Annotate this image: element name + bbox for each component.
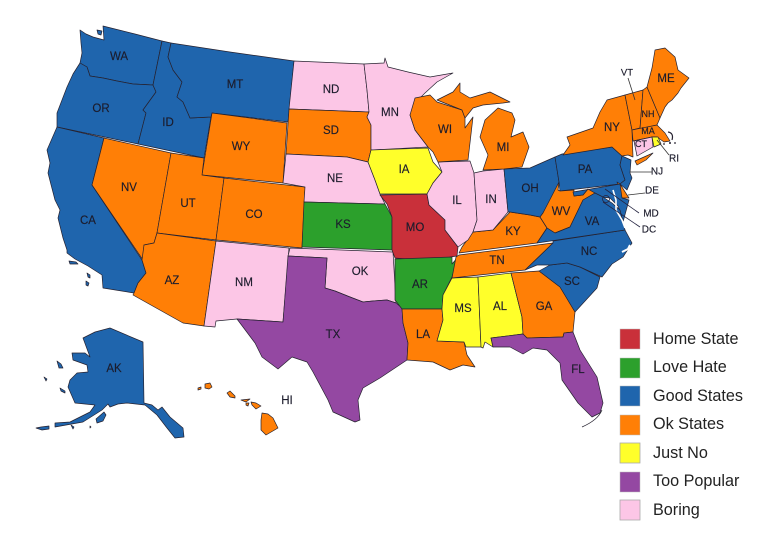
- state: Vermont: [625, 90, 643, 130]
- state: North Dakota: ND: [323, 84, 339, 96]
- state: Kentucky: KY: [505, 226, 521, 238]
- state: Texas: [237, 256, 408, 422]
- state: Ohio: OH: [521, 183, 539, 195]
- state: South Carolina: SC: [564, 276, 580, 288]
- legend item: Love Hate: [620, 358, 727, 378]
- state: Oregon: OR: [92, 103, 110, 115]
- sound: Pamlico: [622, 245, 630, 252]
- state: Colorado: CO: [245, 209, 263, 221]
- state: Washington: [80, 26, 162, 85]
- state: Louisiana: LA: [416, 329, 430, 341]
- legend item: Just No: Just No: [653, 444, 708, 462]
- state: South Dakota: [286, 109, 371, 162]
- state: Idaho: ID: [162, 117, 174, 129]
- callouts: small state labels and leader lines: VT: [621, 68, 633, 78]
- legend item: Good States: [620, 386, 743, 406]
- state: Alaska: [36, 328, 184, 438]
- legend item: Ok States: Ok States: [653, 415, 724, 433]
- state: Wisconsin: WI: [438, 124, 452, 136]
- callouts: small state labels and leader lines: [602, 68, 679, 236]
- state: North Carolina: [525, 230, 632, 277]
- state: Ohio: [504, 157, 559, 217]
- state: Iowa: [368, 148, 442, 194]
- state: Delaware: [617, 182, 629, 198]
- state: Michigan: MI: [497, 142, 509, 154]
- state: Alabama: AL: [493, 301, 508, 313]
- state: Louisiana: [402, 309, 475, 370]
- state: Iowa: IA: [399, 164, 410, 176]
- state: Washington: WA: [110, 51, 128, 63]
- callouts: small state labels and leader lines: NJ: [651, 166, 663, 178]
- state: New Jersey: [620, 156, 632, 190]
- state: Arizona: [133, 233, 216, 326]
- state: Colorado: [216, 178, 305, 248]
- legend item: Home State: [620, 329, 738, 349]
- state: Wyoming: WY: [232, 141, 251, 153]
- state: Georgia: GA: [536, 301, 553, 313]
- state: Wyoming: [202, 113, 287, 183]
- state: Florida: [491, 332, 603, 427]
- legend item: Boring: Boring: [653, 501, 700, 519]
- state: Virginia: [537, 193, 625, 243]
- state: Nevada: NV: [121, 182, 137, 194]
- state: Mississippi: MS: [454, 303, 472, 315]
- legend item: Ok States: [620, 415, 724, 435]
- state: Alabama: [478, 273, 523, 348]
- state: Arkansas: [395, 257, 458, 309]
- state: Georgia: [511, 271, 575, 338]
- state: Missouri: MO: [406, 222, 424, 234]
- state: Missouri: [380, 194, 458, 263]
- callouts: small state labels and leader lines: DC: [642, 224, 656, 236]
- state: South Carolina: [539, 263, 600, 312]
- state: Hawaii: HI: [281, 395, 293, 407]
- state: Oklahoma: [288, 248, 396, 303]
- state: Oregon: [57, 63, 156, 144]
- state: Utah: [157, 153, 224, 240]
- state: New Hampshire: NH: [642, 109, 654, 119]
- state: North Dakota: [289, 61, 369, 112]
- state: North Carolina: NC: [581, 246, 597, 258]
- callouts: small state labels and leader lines: DE: [645, 186, 659, 196]
- state: Connecticut: [634, 137, 653, 156]
- state: Rhode Island: [652, 137, 661, 147]
- state: Indiana: [473, 169, 508, 232]
- state: Massachusetts: MA: [641, 126, 655, 136]
- state: Montana: [168, 43, 294, 122]
- state: Montana: MT: [227, 79, 243, 91]
- state: West Virginia: WV: [552, 206, 571, 218]
- state: Michigan: [437, 83, 529, 170]
- bay: Chesapeake: [613, 190, 625, 228]
- callouts: small state labels and leader lines: MD: [643, 208, 659, 220]
- state: Virginia: VA: [585, 216, 600, 228]
- state: Minnesota: MN: [381, 107, 399, 119]
- state: Oklahoma: OK: [352, 266, 369, 278]
- state: Nebraska: NE: [327, 173, 343, 185]
- legend item: Love Hate: Love Hate: [653, 358, 727, 376]
- state: New Mexico: NM: [235, 277, 253, 289]
- state: New Hampshire: [640, 87, 660, 129]
- legend item: Good States: Good States: [653, 387, 743, 405]
- state: Maine: [647, 48, 689, 118]
- callouts: small state labels and leader lines: RI: [669, 154, 679, 164]
- state: Indiana: IN: [485, 194, 497, 206]
- state: New Mexico: [204, 241, 289, 327]
- state: Illinois: IL: [452, 195, 462, 207]
- state: Wisconsin: [410, 95, 473, 162]
- state: Minnesota: [364, 58, 453, 150]
- state: Florida: FL: [571, 364, 585, 376]
- legend item: Home State: Home State: [653, 330, 738, 348]
- state: New York: [563, 95, 653, 165]
- state: Maine: ME: [657, 73, 675, 85]
- state: Connecticut: CT: [635, 139, 647, 149]
- state: Arkansas: AR: [412, 279, 428, 291]
- state: Idaho: [138, 41, 211, 158]
- state: Hawaii: [198, 383, 293, 435]
- state: California: CA: [80, 215, 96, 227]
- state: Alaska: AK: [106, 363, 122, 375]
- state: Texas: TX: [326, 329, 341, 341]
- state: Nebraska: [283, 154, 385, 204]
- state: South Dakota: SD: [323, 125, 339, 137]
- state: Tennessee: [452, 243, 553, 278]
- state: West Virginia: [540, 182, 595, 233]
- legend item: Too Popular: [620, 472, 740, 492]
- state: Maryland: [573, 184, 629, 222]
- state: Pennsylvania: PA: [578, 164, 593, 176]
- state: Massachusetts: [632, 125, 676, 145]
- state: Arizona: AZ: [165, 275, 179, 287]
- state: Tennessee: TN: [489, 255, 505, 267]
- legend: [620, 329, 743, 520]
- state: California: [47, 127, 146, 293]
- state: Kansas: KS: [335, 219, 351, 231]
- state: Nevada: [92, 138, 171, 260]
- state: Mississippi: [437, 277, 481, 347]
- state: Kansas: [302, 202, 392, 250]
- state: Kentucky: [459, 212, 547, 253]
- legend item: Boring: [620, 500, 700, 520]
- state: Illinois: [427, 161, 477, 247]
- state: Utah: UT: [180, 198, 196, 210]
- state: New York: NY: [604, 122, 620, 134]
- legend item: Too Popular: Too Popular: [653, 472, 740, 490]
- legend item: Just No: [620, 443, 708, 463]
- state: Pennsylvania: [555, 147, 625, 191]
